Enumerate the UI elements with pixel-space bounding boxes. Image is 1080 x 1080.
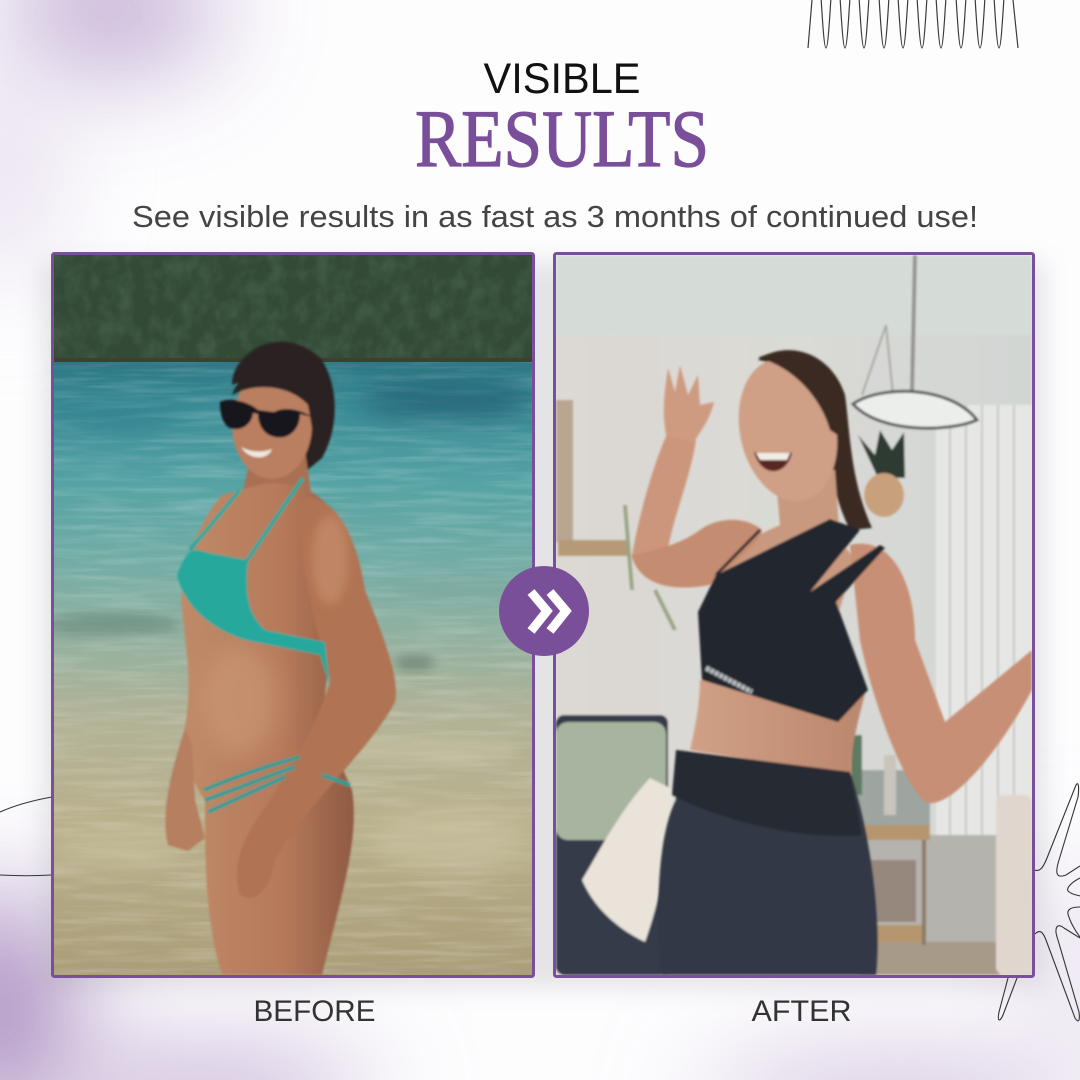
radiator: [936, 405, 1032, 837]
bikini top: [177, 550, 330, 688]
hair back: [758, 350, 872, 530]
woman after: [631, 350, 1032, 975]
belly highlight: [208, 648, 278, 752]
midriff: [690, 680, 866, 775]
decorative wave line, top right: [808, 0, 1018, 48]
before photo frame: [52, 254, 534, 976]
side table: [855, 825, 930, 942]
woman before: [165, 342, 396, 975]
open mouth: [754, 452, 792, 471]
picture frame: [556, 400, 573, 542]
neck: [242, 454, 312, 492]
lamp cord: [912, 255, 915, 392]
panel: after photo: [556, 255, 1032, 975]
near arm: [237, 498, 396, 898]
title: VISIBLE: VISIBLE: [484, 55, 640, 103]
lamp: [853, 391, 977, 428]
raised hand: [664, 365, 714, 442]
far shoulder and arm: [850, 544, 1032, 803]
body: [182, 483, 354, 975]
subtitle: See visible results in as fast as 3 months of continued use!: [132, 199, 978, 234]
decorative lines, left edge: [0, 797, 52, 876]
head: [726, 350, 850, 510]
label: before: BEFORE: [254, 995, 376, 1028]
raised forearm: [632, 432, 696, 555]
bottles: [845, 770, 930, 825]
after photo frame: [554, 254, 1034, 976]
blanket: [582, 778, 674, 942]
bikini bottom: [204, 757, 350, 812]
decorative starburst, bottom right: [998, 784, 1080, 1021]
panel: before photo: [40, 255, 540, 975]
wall plant: [625, 505, 675, 630]
forest and water scene: [40, 255, 540, 975]
room scene: [556, 255, 1032, 975]
sports top: [698, 519, 885, 722]
sunglasses: [220, 400, 312, 438]
double chevron icon: [531, 592, 566, 631]
neck and chest: [728, 468, 854, 612]
arrow badge: [499, 566, 589, 656]
potted plant: [858, 430, 905, 478]
shelf: [558, 540, 628, 556]
upper arm: [631, 520, 762, 587]
shoulder highlight: [312, 515, 348, 605]
label: after: AFTER: [752, 995, 852, 1028]
leggings: [658, 750, 878, 975]
head: [232, 371, 312, 479]
far arm: [165, 728, 205, 851]
smile: [241, 447, 272, 457]
hair: [232, 342, 335, 472]
floor: [860, 835, 1000, 975]
bikini straps: [190, 478, 303, 562]
bin: [996, 795, 1032, 975]
title: RESULTS: RESULTS: [415, 93, 709, 184]
sofa: [556, 715, 668, 975]
top logo band: [706, 668, 752, 692]
top strap: [716, 530, 760, 575]
